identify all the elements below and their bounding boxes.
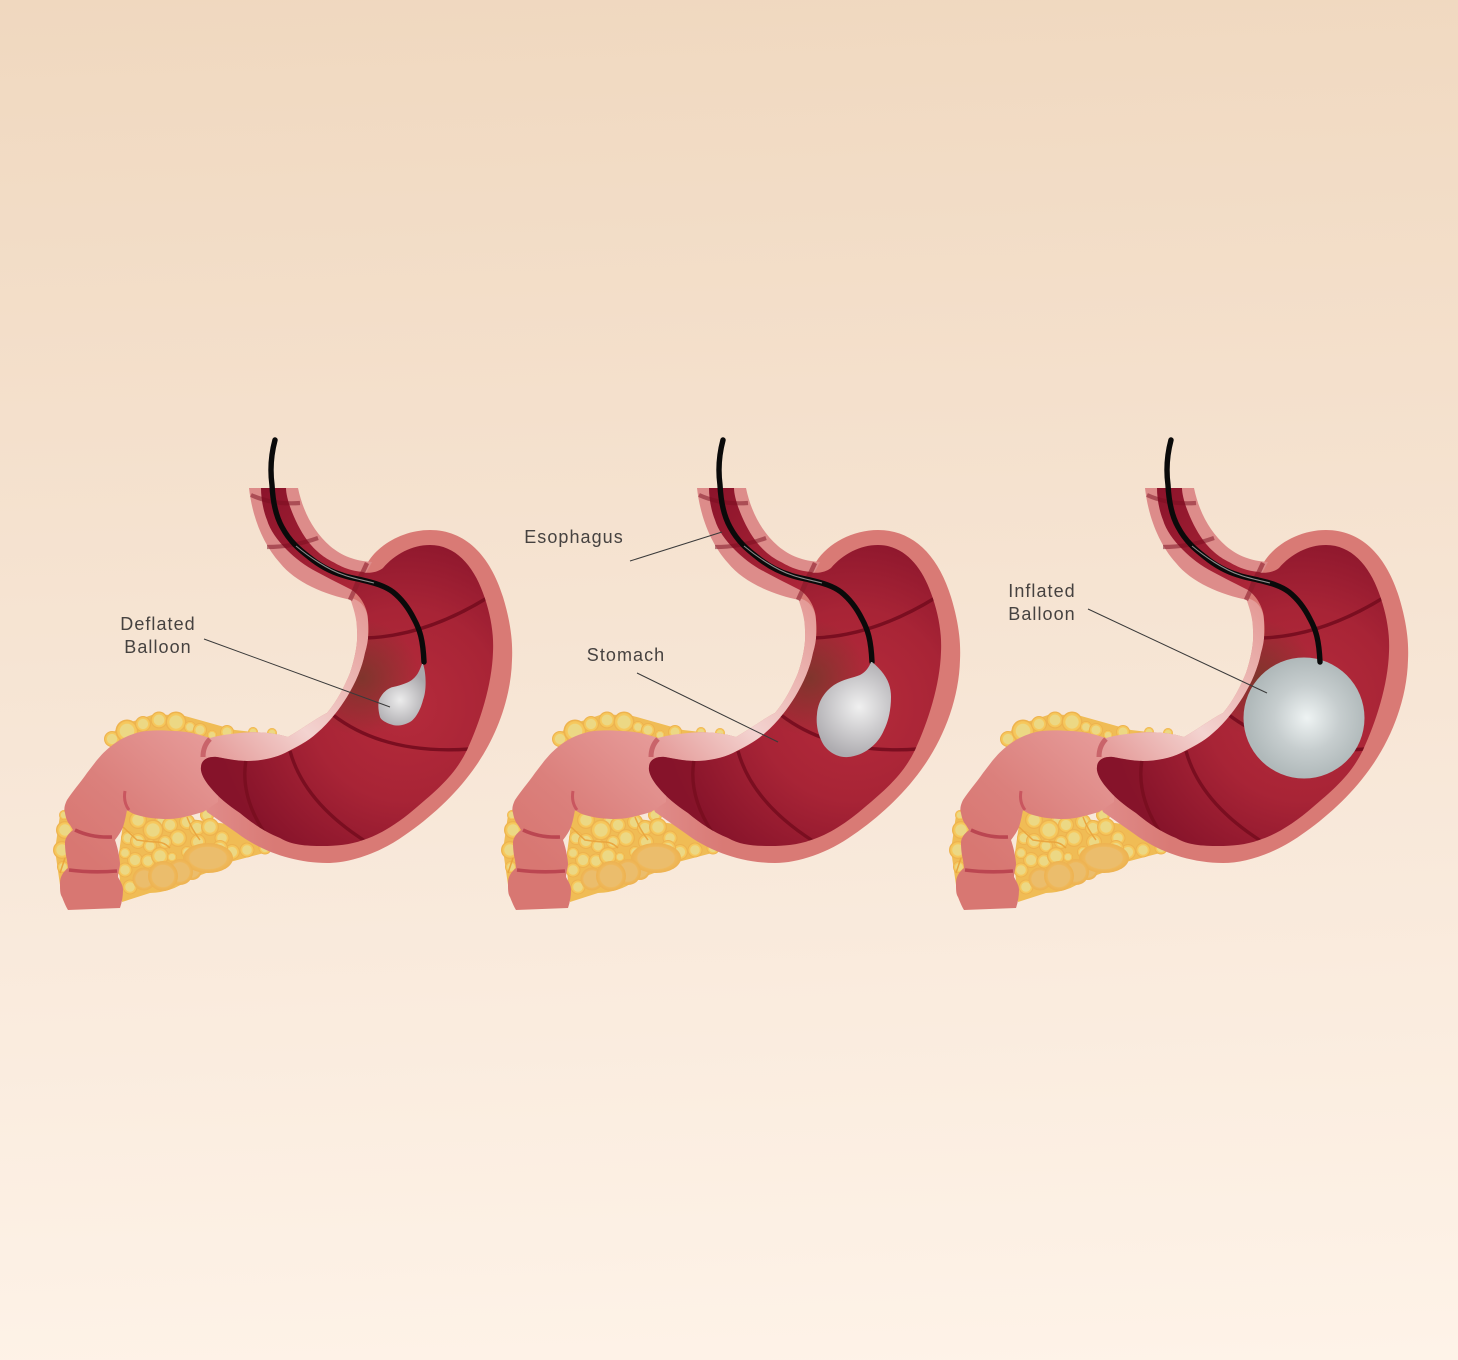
- duodenum: [956, 730, 1114, 910]
- label: deflated balloon: Balloon: [124, 637, 192, 657]
- partially inflated balloon: [817, 662, 891, 757]
- esophagus wall: [1145, 488, 1268, 600]
- stomach outer wall: [638, 530, 960, 863]
- leader line: esophagus: [630, 532, 722, 561]
- stomach lumen: [1096, 488, 1389, 846]
- pyloric fold: [203, 739, 210, 757]
- pyloric fold: [651, 739, 658, 757]
- duodenum: [60, 730, 218, 910]
- label: esophagus: Esophagus: [524, 527, 624, 547]
- catheter tube: [719, 440, 872, 662]
- leader line: stomach: [637, 673, 778, 742]
- stomach lumen: [200, 488, 493, 846]
- label: stomach: Stomach: [587, 645, 665, 665]
- catheter tube: [271, 440, 424, 662]
- leader line: inflated balloon: [1088, 609, 1267, 693]
- inflated balloon: [1244, 658, 1364, 778]
- stomach folds: [1141, 495, 1383, 841]
- inner light wall band: [653, 598, 816, 762]
- stomach outer wall: [1086, 530, 1408, 863]
- label: deflated balloon: Deflated: [120, 614, 196, 634]
- deflated balloon: [378, 664, 426, 726]
- esophagus wall: [249, 488, 372, 600]
- panel: inflated balloon stage: [949, 440, 1408, 910]
- stomach folds: [245, 495, 487, 841]
- panel: deflated balloon stage: [53, 440, 512, 910]
- leader line: deflated balloon: [204, 639, 390, 707]
- stomach outer wall: [190, 530, 512, 863]
- pancreas: [53, 712, 280, 902]
- pancreas: [501, 712, 728, 902]
- stomach folds: [693, 495, 935, 841]
- stomach lumen: [648, 488, 941, 846]
- label: inflated balloon: Inflated: [1008, 581, 1076, 601]
- duodenum: [508, 730, 666, 910]
- inner light wall band: [205, 598, 368, 762]
- pancreas: [949, 712, 1176, 902]
- inner light wall band: [1101, 598, 1264, 762]
- catheter tube: [1167, 440, 1320, 662]
- panel: partially inflated balloon stage: [501, 440, 960, 910]
- label: inflated balloon: Balloon: [1008, 604, 1076, 624]
- pyloric fold: [1099, 739, 1106, 757]
- esophagus wall: [697, 488, 820, 600]
